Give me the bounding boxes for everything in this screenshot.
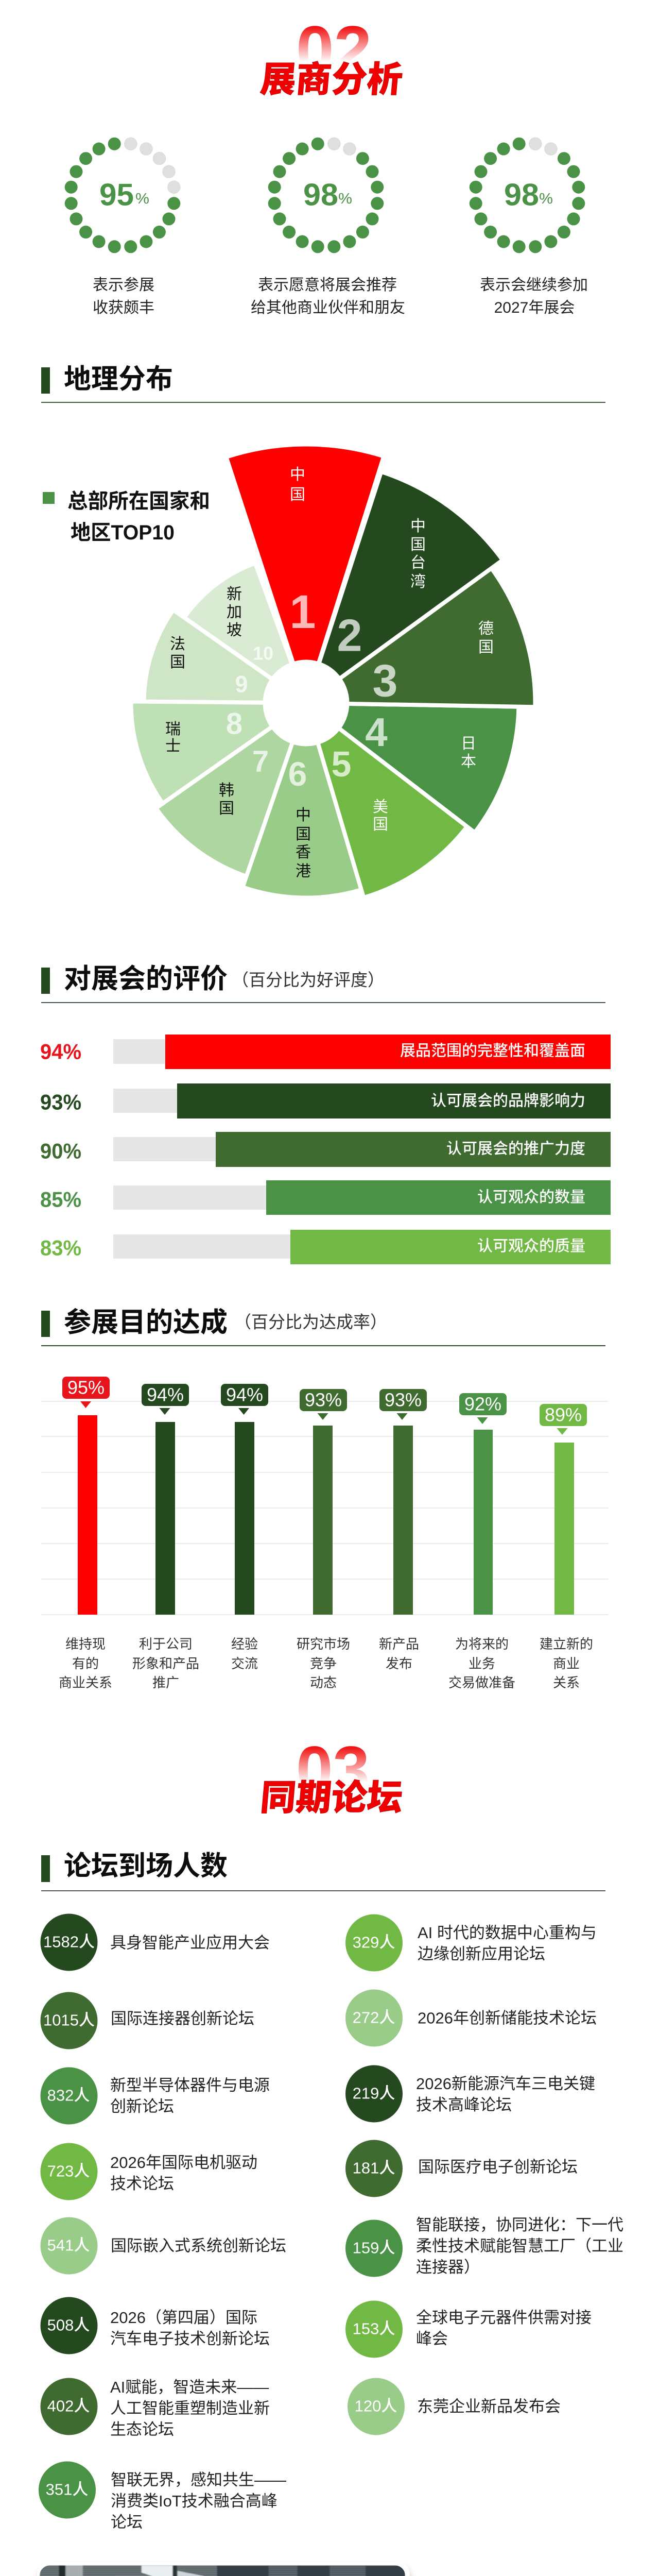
- caption 3: 2027年展会: [494, 299, 575, 316]
- heading: 对展会的评价: [41, 963, 605, 1003]
- column labels: 新产品: [379, 1636, 419, 1652]
- column labels: [59, 1636, 593, 1690]
- slice 10 新加坡: 坡: [227, 621, 242, 639]
- slice 5 美国: 国: [373, 816, 388, 833]
- forum 832: 新型半导体器件与电源: [110, 2076, 270, 2094]
- slice 7 韩国: 韩: [219, 782, 234, 799]
- forum 832: [40, 2067, 270, 2125]
- forum 159: [345, 2215, 623, 2277]
- forum 181: [345, 2140, 578, 2197]
- big number 03: 03: [296, 1732, 370, 1807]
- bar row 93%: 认可展会的品牌影响力: [431, 1092, 585, 1110]
- heading: 对展会的评价: 对展会的评价: [64, 963, 228, 994]
- slice 4 日本: 日: [461, 735, 476, 752]
- title: 展商分析: [259, 59, 404, 99]
- column labels: 有的: [72, 1656, 99, 1671]
- forum 832: 创新论坛: [110, 2097, 174, 2115]
- forum 541: [40, 2217, 286, 2274]
- forum 153: 全球电子元器件供需对接: [416, 2308, 592, 2327]
- column labels: 商业: [553, 1656, 580, 1671]
- forum 272: [345, 1990, 597, 2046]
- bar row 85%: [40, 1180, 611, 1215]
- slice 6 中国香港: 6: [288, 755, 307, 793]
- forum 832: 832人: [47, 2087, 90, 2104]
- forum 219: 技术高峰论坛: [416, 2096, 512, 2113]
- slice 8 瑞士: [131, 702, 306, 804]
- column labels: 为将来的: [455, 1636, 509, 1652]
- forum 508: 2026（第四届）国际: [110, 2308, 257, 2327]
- column 89%: [540, 1404, 587, 1615]
- forum 723: 2026年国际电机驱动: [110, 2154, 257, 2171]
- bar row 83%: [40, 1230, 611, 1264]
- bar row 94%: [40, 1035, 611, 1069]
- column 89%: 89%: [545, 1404, 582, 1425]
- slice 8 瑞士: 士: [165, 738, 181, 754]
- hub: [263, 659, 349, 746]
- caption 2: 给其他商业伙伴和朋友: [251, 299, 405, 316]
- forum 329: 边缘创新应用论坛: [418, 1944, 545, 1963]
- forum 351: 351人: [46, 2480, 88, 2499]
- forum 402: AI赋能，智造未来——: [110, 2378, 269, 2396]
- column labels: 竞争: [310, 1656, 337, 1671]
- forum 272: 2026年创新储能技术论坛: [418, 2009, 597, 2027]
- forum 219: [345, 2065, 595, 2123]
- forum 1015: [40, 1992, 254, 2049]
- forum 120: 东莞企业新品发布会: [417, 2398, 561, 2415]
- forum 402: 人工智能重塑制造业新: [110, 2399, 270, 2417]
- forum 219: 2026新能源汽车三电关键: [416, 2074, 595, 2093]
- bar row 90%: 认可展会的推广力度: [446, 1141, 585, 1157]
- forum 1582: 1582人: [43, 1933, 95, 1951]
- forum 402: [40, 2378, 270, 2438]
- slice 3 德国: [306, 568, 535, 707]
- slice 10 新加坡: 新: [227, 585, 242, 603]
- legend: TOP10: 总部所在国家和: [67, 490, 210, 513]
- forum 351: 智联无界，感知共生——: [111, 2471, 286, 2488]
- forum 329: [345, 1914, 597, 1971]
- forum 541: 国际嵌入式系统创新论坛: [111, 2237, 286, 2255]
- bar row 85%: 85%: [40, 1187, 81, 1212]
- slice 10 新加坡: [184, 563, 306, 703]
- column labels: 形象和产品: [132, 1656, 199, 1671]
- slice 1 中国: 1: [289, 586, 316, 638]
- forum 120: 120人: [355, 2397, 397, 2415]
- slice 10 新加坡: 加: [227, 604, 242, 620]
- forum 153: 153人: [353, 2319, 395, 2338]
- slice 2 中国台湾: [306, 472, 502, 703]
- slice 5 美国: [306, 703, 467, 897]
- column 94%: [142, 1384, 189, 1615]
- big number 02: 02: [296, 12, 372, 87]
- progress ring: 98% return: 98: [504, 177, 539, 212]
- forum 1015: 国际连接器创新论坛: [111, 2009, 254, 2028]
- slice 2 中国台湾: 湾: [410, 573, 426, 590]
- caption 1: 收获颇丰: [93, 299, 154, 316]
- heading: 参展目的达成: （百分比为达成率）: [234, 1313, 387, 1331]
- column 93%: [379, 1389, 427, 1615]
- column labels: 交流: [231, 1656, 258, 1671]
- progress ring: 98% return: [470, 138, 585, 253]
- column 94%: 94%: [226, 1384, 263, 1405]
- column 93%: 93%: [385, 1389, 422, 1411]
- heading: 论坛到场人数: [41, 1851, 605, 1891]
- column labels: 研究市场: [297, 1636, 350, 1652]
- progress ring: 95%: [65, 138, 180, 253]
- column labels: 关系: [553, 1675, 580, 1690]
- progress ring: 95%: %: [135, 191, 149, 207]
- column 95%: [62, 1377, 110, 1615]
- slice 10 新加坡: 10: [253, 643, 273, 664]
- heading: 参展目的达成: 参展目的达成: [64, 1308, 228, 1337]
- forum 508: 508人: [47, 2316, 90, 2334]
- column labels: 业务: [469, 1656, 495, 1671]
- caption 3: 表示会继续参加: [480, 276, 588, 294]
- forum 159: 159人: [353, 2239, 395, 2257]
- bar row 93%: [40, 1083, 611, 1118]
- forum 402: 生态论坛: [110, 2420, 174, 2438]
- forum 120: [348, 2378, 561, 2435]
- slice 2 中国台湾: 台: [410, 554, 426, 571]
- bar row 85%: 认可观众的数量: [477, 1189, 585, 1206]
- column labels: 商业关系: [59, 1675, 112, 1690]
- forum 329: AI 时代的数据中心重构与: [418, 1924, 597, 1941]
- forum 541: 541人: [47, 2236, 90, 2255]
- bar row 93%: 93%: [40, 1090, 81, 1114]
- column labels: 维持现: [65, 1636, 106, 1652]
- slice 8 瑞士: 8: [226, 707, 242, 741]
- column labels: 经验: [231, 1636, 258, 1652]
- slice 2 中国台湾: 国: [410, 536, 426, 553]
- heading: 地理分布: 地理分布: [64, 364, 173, 395]
- slice 5 美国: 美: [373, 799, 388, 815]
- slice 9 法国: 国: [170, 653, 185, 671]
- column 93%: [300, 1389, 347, 1615]
- heading: 地理分布: [41, 364, 605, 403]
- heading: 对展会的评价: （百分比为好评度）: [232, 971, 385, 989]
- caption 1: 表示参展: [93, 276, 154, 294]
- bar row 83%: 83%: [40, 1235, 81, 1260]
- rose chart: top 10 regions: [131, 445, 535, 897]
- forum 508: [40, 2297, 270, 2354]
- caption 2: 表示愿意将展会推荐: [258, 276, 397, 294]
- slice 9 法国: 法: [170, 636, 185, 652]
- column 92%: [459, 1393, 507, 1615]
- slice 6 中国香港: [242, 703, 361, 897]
- slice 7 韩国: 国: [219, 800, 234, 817]
- forum 1582: [40, 1913, 270, 1971]
- forum 1015: 1015人: [43, 2011, 95, 2029]
- column 95%: 95%: [67, 1377, 105, 1398]
- heading: 参展目的达成: [41, 1308, 605, 1346]
- forum 723: 技术论坛: [110, 2174, 174, 2193]
- forum 181: 181人: [353, 2159, 395, 2177]
- progress ring: 98% recommend: %: [338, 191, 352, 207]
- slice 4 日本: [306, 703, 518, 833]
- forum 159: 柔性技术赋能智慧工厂（工业: [416, 2237, 623, 2255]
- slice 1 中国: 国: [290, 486, 305, 503]
- column labels: 推广: [152, 1675, 179, 1690]
- progress ring: 98% recommend: [268, 138, 384, 253]
- forum 153: 峰会: [416, 2330, 448, 2347]
- slice 2 中国台湾: 2: [337, 610, 362, 660]
- column labels: 建立新的: [540, 1636, 593, 1652]
- slice 6 中国香港: 中: [296, 807, 311, 823]
- bar row 94%: 展品范围的完整性和覆盖面: [400, 1043, 585, 1059]
- slice 6 中国香港: 港: [296, 862, 311, 880]
- progress ring: 95%: 95: [99, 177, 134, 212]
- column labels: 交易做准备: [448, 1675, 515, 1690]
- forum 181: 国际医疗电子创新论坛: [418, 2158, 578, 2176]
- bar row 83%: 认可观众的质量: [477, 1238, 585, 1255]
- slice 6 中国香港: 香: [296, 844, 311, 860]
- legend: TOP10: [43, 490, 210, 544]
- forum 508: 汽车电子技术创新论坛: [110, 2330, 270, 2347]
- slice 4 日本: 本: [461, 753, 476, 770]
- title: 同期论坛: [259, 1777, 404, 1818]
- column 94%: [221, 1384, 268, 1615]
- progress ring: 98% return: %: [539, 191, 553, 207]
- progress ring: 98% recommend: 98: [303, 177, 338, 212]
- column labels: 动态: [310, 1675, 337, 1690]
- column chart: [41, 1377, 609, 1615]
- forum 351: 论坛: [111, 2513, 143, 2531]
- column 92%: 92%: [464, 1393, 501, 1415]
- heading: 论坛到场人数: 论坛到场人数: [64, 1851, 228, 1882]
- slice 3 德国: 德: [478, 620, 494, 637]
- slice 4 日本: 4: [365, 709, 388, 755]
- column 94%: 94%: [147, 1384, 184, 1405]
- slice 9 法国: [144, 610, 306, 703]
- forum 351: 消费类IoT技术融合高峰: [111, 2492, 278, 2510]
- slice 9 法国: 9: [235, 671, 248, 698]
- column labels: 发布: [386, 1656, 412, 1671]
- slice 1 中国: 中: [290, 466, 305, 483]
- slice 6 中国香港: 国: [296, 825, 311, 843]
- slice 3 德国: 3: [373, 655, 397, 706]
- column 93%: 93%: [305, 1389, 342, 1411]
- slice 8 瑞士: 瑞: [165, 720, 181, 738]
- forum 723: [40, 2143, 257, 2200]
- slice 7 韩国: 7: [252, 745, 269, 778]
- forum 159: 智能联接，协同进化：下一代: [416, 2215, 623, 2234]
- forum 272: 272人: [353, 2008, 395, 2027]
- forum 329: 329人: [353, 1933, 395, 1952]
- forum 402: 402人: [47, 2397, 90, 2415]
- forum 351: [39, 2462, 286, 2531]
- column labels: 利于公司: [139, 1636, 193, 1652]
- forum 723: 723人: [47, 2162, 90, 2180]
- forum 219: 219人: [353, 2084, 395, 2102]
- forum 159: 连接器）: [416, 2258, 480, 2276]
- photo: forum audience with stage: [36, 2565, 413, 2576]
- slice 5 美国: 5: [332, 744, 351, 784]
- slice 7 韩国: [156, 703, 306, 876]
- legend: TOP10: 地区TOP10: [71, 521, 175, 544]
- section header: 03 同期论坛: [259, 1732, 404, 1818]
- slice 1 中国: [226, 445, 384, 703]
- slice 2 中国台湾: 中: [410, 517, 426, 535]
- slice 3 德国: 国: [478, 639, 494, 655]
- forum 153: [345, 2301, 592, 2358]
- forum 1582: 具身智能产业应用大会: [110, 1934, 270, 1952]
- bar row 90%: 90%: [40, 1139, 81, 1163]
- bar row 90%: [40, 1132, 611, 1167]
- section header: 02 展商分析: [259, 12, 404, 99]
- bar row 94%: 94%: [40, 1040, 81, 1063]
